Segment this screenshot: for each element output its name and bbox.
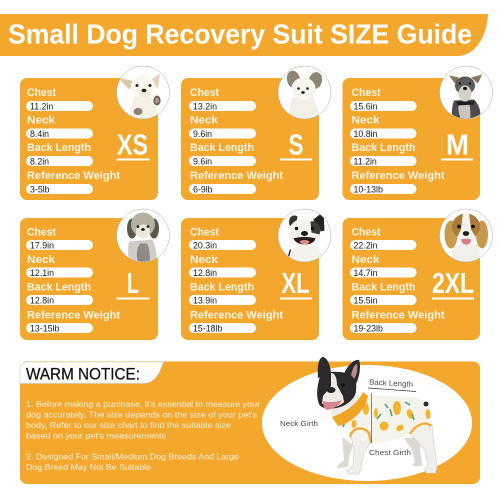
- XS measurements: 3-5lb: [30, 184, 50, 194]
- notice item 1: dog accurately, The size depends on the size of your pet's: [26, 410, 257, 420]
- S measurements: 9.6in: [193, 156, 212, 166]
- notice item 2: 2. Designed For Small/Medium Dog Breeds And Large: [26, 452, 240, 462]
- notice item 1: 1. Before making a purchase, it's essential to measure your: [26, 400, 260, 409]
- XL measurements: 12.8in: [193, 268, 217, 278]
- S measurements: Neck: [190, 114, 219, 126]
- panel: S size card: [181, 66, 331, 200]
- XS measurements: [26, 87, 120, 194]
- XS measurements: 8.2in: [30, 156, 49, 166]
- panel: M size card: [342, 66, 492, 200]
- S measurements: 6-9lb: [193, 184, 213, 194]
- L size label: L: [127, 268, 139, 300]
- S measurements: [189, 87, 283, 194]
- XL measurements: 20.3in: [193, 240, 217, 250]
- panel: warm notice: [20, 357, 480, 484]
- 2XL measurements: 15.5in: [354, 295, 378, 305]
- XL size label: XL: [282, 268, 310, 300]
- neck girth label: Neck Girth: [280, 419, 318, 428]
- L measurements: Back Length: [27, 282, 91, 294]
- 2XL dog portrait: beagle: [440, 209, 492, 266]
- XL dog portrait: boston terrier: [278, 209, 331, 266]
- panel: XL size card: [181, 209, 331, 340]
- panel: L size card: [20, 209, 170, 340]
- XS measurements: Back Length: [27, 142, 91, 154]
- M size label: M: [446, 130, 469, 162]
- M measurements: Neck: [352, 114, 380, 126]
- L measurements: 12.8in: [30, 295, 54, 305]
- S measurements: Reference Weight: [190, 170, 283, 182]
- XL measurements: 15-18lb: [193, 323, 222, 333]
- chest girth label with line: Chest Girth: [369, 448, 411, 457]
- S measurements: Back Length: [190, 142, 254, 154]
- L measurements: 13-15lb: [30, 323, 59, 333]
- back length label: Back Length: [369, 378, 413, 389]
- tail: [424, 402, 428, 406]
- notice item 1: [26, 400, 260, 440]
- XL measurements: Back Length: [190, 282, 254, 294]
- S size label: S: [288, 130, 304, 162]
- L measurements: Neck: [27, 254, 56, 266]
- XS measurements: 11.2in: [30, 101, 53, 111]
- notice item 1: based on your pet's measurements: [26, 432, 166, 440]
- XL measurements: Reference Weight: [190, 310, 283, 322]
- XL measurements: Chest: [190, 226, 219, 238]
- M measurements: Reference Weight: [352, 170, 445, 182]
- M measurements: 15.6in: [354, 101, 378, 111]
- L measurements: Chest: [27, 226, 56, 238]
- XS dog portrait: chihuahua: [116, 66, 170, 122]
- suit body: [337, 394, 432, 443]
- L measurements: 12.1in: [30, 268, 54, 278]
- L size label: [116, 268, 150, 300]
- M measurements: Back Length: [352, 142, 416, 154]
- panel: XS size card: [20, 66, 170, 200]
- ears: [318, 357, 360, 384]
- chest girth label with line: [369, 393, 411, 457]
- far legs: [337, 437, 422, 468]
- M measurements: 11.2in: [354, 156, 377, 166]
- XL measurements: 13.9in: [193, 295, 217, 305]
- near legs: [347, 424, 437, 474]
- notice item 2: Dog Breed May Not Be Suitable: [26, 463, 152, 472]
- L measurements: 17.9in: [30, 240, 54, 250]
- head: [317, 372, 356, 409]
- orange collar: [332, 392, 368, 426]
- 2XL measurements: Back Length: [352, 282, 416, 294]
- XS measurements: Chest: [27, 87, 56, 99]
- XL measurements: Neck: [190, 254, 219, 266]
- white neck: [330, 394, 362, 420]
- french bulldog wearing recovery suit: [317, 357, 437, 474]
- 2XL measurements: Reference Weight: [352, 310, 445, 322]
- XL measurements: [189, 226, 283, 333]
- S dog portrait: fluffy white dog: [278, 66, 331, 122]
- 2XL size label: 2XL: [432, 268, 474, 300]
- XS measurements: Neck: [27, 114, 56, 126]
- XS measurements: 8.4in: [30, 129, 49, 139]
- S measurements: Chest: [190, 87, 219, 99]
- 2XL measurements: 22.2in: [354, 240, 378, 250]
- 2XL measurements: 19-23lb: [354, 323, 383, 333]
- panel: 2XL size card: [342, 209, 492, 340]
- S size label: [280, 130, 312, 162]
- M dog portrait: schnauzer: [440, 66, 492, 122]
- M measurements: 10-13lb: [354, 184, 383, 194]
- L measurements: [26, 226, 120, 333]
- M measurements: 10.8in: [354, 129, 378, 139]
- S measurements: 13.2in: [193, 101, 217, 111]
- 2XL measurements: Chest: [352, 226, 381, 238]
- L dog portrait: shih tzu: [116, 209, 170, 266]
- M measurements: Chest: [352, 87, 381, 99]
- XS measurements: Reference Weight: [27, 170, 120, 182]
- title banner: Small Dog Recovery Suit SIZE Guide: [8, 18, 472, 50]
- muzzle and tongue: [326, 387, 336, 393]
- white ellipse backdrop: [262, 365, 472, 481]
- S measurements: 9.6in: [193, 129, 212, 139]
- XS size label: XS: [117, 130, 148, 162]
- L measurements: Reference Weight: [27, 310, 120, 322]
- notice item 2: [26, 452, 240, 472]
- 2XL measurements: [350, 226, 445, 333]
- notice item 1: body, Refer to our size chart to find the suitable size: [26, 421, 232, 430]
- 2XL measurements: 14.7in: [354, 268, 378, 278]
- M measurements: [350, 87, 445, 194]
- 2XL measurements: Neck: [352, 254, 380, 266]
- warm notice heading tab: WARM NOTICE:: [26, 366, 140, 384]
